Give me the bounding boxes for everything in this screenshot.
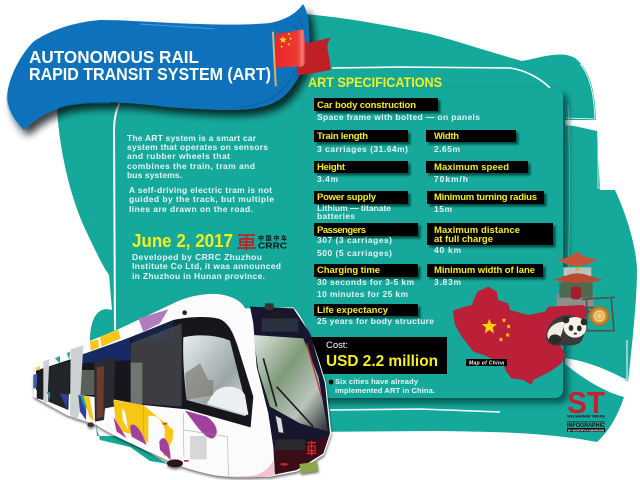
map of China <box>453 287 590 385</box>
development text block: in Zhuzhou in Hunan province. <box>132 271 265 281</box>
carriage joints <box>70 345 83 419</box>
spec: car body construction: Car body construction <box>317 100 416 111</box>
train body <box>33 294 331 477</box>
spec: train length: Train length <box>317 131 368 142</box>
intro text block: guided by the track, but multiple <box>129 194 274 204</box>
spec: minimum width of lane <box>427 264 543 287</box>
intro text block: lines are drawn on the road. <box>129 204 253 214</box>
note: six cities: Six cities have already <box>335 377 419 386</box>
spec: train length: 3 carriages (31.64m) <box>317 144 408 154</box>
cost box <box>311 337 447 374</box>
panda icon <box>546 315 587 345</box>
intro text block: The ART system is a smart car <box>127 133 257 143</box>
intro text block <box>127 133 274 214</box>
spec: passengers: 307 (3 carriages) <box>317 235 392 245</box>
spec: width: Width <box>434 131 459 142</box>
wheels <box>167 459 183 467</box>
spec: maximum distance <box>427 223 553 255</box>
spec: power supply: batteries <box>317 211 355 221</box>
spec: minimum turning radius: Minimum turning radius <box>434 192 537 203</box>
date heading: June 2, 2017 <box>132 231 233 251</box>
spec: minimum turning radius: 15m <box>434 204 452 214</box>
banner <box>7 4 309 130</box>
ST logo: NEW SARAWAK TRIBUNE <box>567 414 606 418</box>
spec: minimum width of lane: Minimum width of lane <box>434 265 535 276</box>
map stars <box>482 318 511 342</box>
spec: power supply: Lithium — titanate <box>317 203 391 213</box>
ST logo: BY MUSTAFA KAMARUDIN <box>568 428 604 432</box>
spec: life expectancy: Life expectancy <box>317 305 389 316</box>
map caption: Map of China <box>469 360 504 366</box>
title <box>29 47 271 84</box>
icon: China flag <box>272 29 331 86</box>
train front <box>250 307 330 474</box>
train illustration <box>33 294 331 477</box>
spec: passengers: 500 (5 carriages) <box>317 248 392 258</box>
title: RAPID TRANSIT SYSTEM (ART) <box>29 64 271 84</box>
spec: height: Height <box>317 162 346 173</box>
intro text block: combines the train, tram and <box>127 161 255 171</box>
white brush strokes <box>114 64 634 412</box>
spec: height: 3.4m <box>317 174 338 184</box>
ST logo: INFOGRAPHIC <box>567 423 606 429</box>
spec: maximum distance: at full charge <box>434 234 493 245</box>
specifications heading: ART SPECIFICATIONS <box>308 74 442 90</box>
spec: car body construction <box>314 98 480 122</box>
CRRC logo <box>237 234 287 250</box>
livery <box>113 400 173 457</box>
note: six cities <box>329 377 435 395</box>
cost box: USD 2.2 million <box>326 353 438 370</box>
intro text block: system that operates on sensors <box>127 142 268 152</box>
spec: passengers: Passengers <box>317 225 366 236</box>
ST logo: ST <box>567 385 605 420</box>
panel lines <box>143 405 228 476</box>
development text block: Developed by CRRC Zhuzhou <box>132 252 262 262</box>
gong icon <box>582 297 615 331</box>
cost box: Cost: <box>326 340 348 351</box>
spec: maximum distance: 40 km <box>434 245 461 255</box>
development text block: Institute Co Ltd, it was announced <box>132 261 281 271</box>
intro text block: A self-driving electric tram is not <box>129 185 272 195</box>
spec: car body construction: Space frame with bolted — on panels <box>317 112 480 122</box>
spec: maximum distance: Maximum distance <box>434 225 520 236</box>
CRRC logo: CRRC <box>258 240 287 250</box>
spec: maximum speed <box>426 161 528 184</box>
pagoda icon <box>553 251 603 308</box>
intro text block: and rubber wheels that <box>127 151 230 161</box>
spec: width <box>426 130 516 154</box>
spec: maximum speed: 70km/h <box>434 174 468 184</box>
spec: width: 2.65m <box>434 144 460 154</box>
note: six cities: implemented ART in China. <box>335 386 435 395</box>
title: AUTONOMOUS RAIL <box>29 47 199 67</box>
map caption <box>466 359 507 366</box>
spec: minimum width of lane: 3.83m <box>434 277 461 287</box>
side windows <box>36 317 253 427</box>
CRRC logo: 中国中车 <box>258 234 287 242</box>
spec: maximum speed: Maximum speed <box>434 162 509 173</box>
skirt tint <box>213 460 275 477</box>
spec: passengers <box>314 223 418 258</box>
spec: charging time: Charging time <box>317 265 380 276</box>
spec: minimum turning radius <box>427 191 544 214</box>
spec: life expectancy: 25 years for body structure <box>317 316 434 326</box>
specifications panel <box>303 74 563 398</box>
spec: power supply: Power supply <box>317 192 377 203</box>
spec: power supply <box>314 191 408 221</box>
spec: charging time: 10 minutes for 25 km <box>317 289 408 299</box>
spec: train length <box>314 130 408 154</box>
spec: charging time: 30 seconds for 3-5 km <box>317 277 414 287</box>
spec: height <box>314 161 408 184</box>
spec: life expectancy <box>314 304 434 326</box>
development text block <box>132 252 281 281</box>
intro text block: bus systems. <box>127 170 182 180</box>
spec: charging time <box>314 264 418 299</box>
